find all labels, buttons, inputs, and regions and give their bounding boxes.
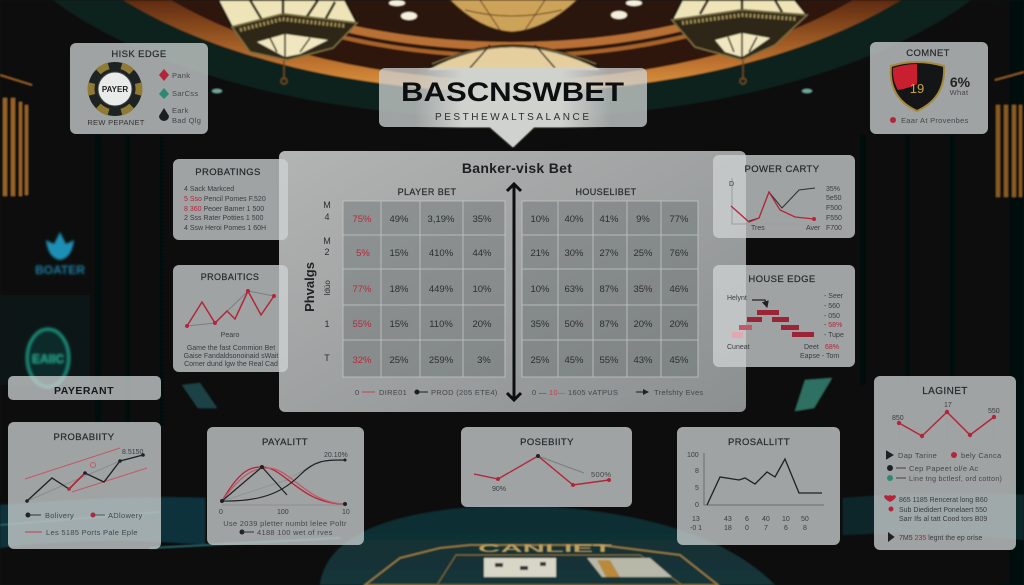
table: player bet: 5% (356, 248, 370, 259)
table: house bet: 76% (669, 248, 689, 259)
heading bar: payerant (8, 376, 161, 400)
table: house bet: 10% (530, 284, 550, 295)
table: house bet: 9% (636, 214, 650, 225)
chart labels: payalitt: 4188 100 wet of rves (257, 528, 333, 537)
chart labels: house edge: Deet (804, 344, 819, 351)
legend: lagniet: bely Canca (961, 451, 1002, 460)
chart labels: prosallitt: 6 (745, 516, 749, 523)
chart labels: house edge: - Tupe (824, 332, 844, 339)
heading: house edge: HOUSE EDGE (748, 274, 816, 285)
table: player bet: 20% (472, 319, 492, 330)
legend: probability (25, 511, 142, 537)
table: house bet: 45% (564, 355, 584, 366)
legend: probability: Bolivery (45, 511, 74, 520)
background sign: green emblem: EAIIC (32, 352, 64, 366)
table: player bet: 75% (352, 214, 372, 225)
stat: 6%: 6% (950, 74, 971, 90)
chart labels: house edge: 68% (825, 344, 839, 351)
background sign: blue logo: BOATER (35, 263, 85, 277)
table: house bet: 25% (530, 355, 550, 366)
chart labels: prosallitt: 8 (695, 468, 699, 475)
table: player bet: 259% (429, 355, 454, 366)
chart labels: house edge: - 560 (824, 303, 840, 310)
row labels: M (323, 236, 331, 246)
panel: main table (279, 151, 746, 412)
table: house bet: 25% (633, 248, 653, 259)
panel: comment shield: What (950, 88, 969, 97)
table: house bet: 30% (564, 248, 584, 259)
chip legend (159, 69, 201, 125)
line chart: posebiity (474, 454, 611, 487)
chart labels: prosallitt: 5 (695, 485, 699, 492)
row labels: M (323, 200, 331, 210)
table: house bet: 20% (669, 319, 689, 330)
row labels (323, 200, 332, 363)
side label: phvalgs: Phvalgs (302, 262, 317, 312)
table: house bet: 27% (599, 248, 619, 259)
legend: lagniet: Line tng bctlesf, ord cotton) (909, 476, 1002, 483)
chart labels: power (729, 181, 842, 232)
chart labels: power: D (729, 181, 734, 188)
panel: comment shield (870, 42, 988, 134)
chart labels: lagniet: 850 (892, 415, 904, 422)
table: house bet: 50% (564, 319, 584, 330)
chart labels: house edge: Helynt (727, 295, 747, 302)
heading: banker-risk bet: Banker-visk Bet (462, 160, 572, 176)
table: house bet: 43% (633, 355, 653, 366)
table: house bet: 87% (599, 284, 619, 295)
table: house bet: 55% (599, 355, 619, 366)
legend: house table (532, 388, 703, 397)
panel: probability (8, 422, 161, 549)
chart labels: power: F700 (826, 225, 842, 232)
chart labels: prosallitt: 6 (784, 525, 788, 532)
line chart: prosallitt (704, 453, 824, 505)
heading: probability: PROBABIITY (53, 432, 115, 443)
panel: probaitics (173, 265, 288, 372)
legend: house table: 1605 vATPUS (568, 388, 618, 397)
chart labels: prosallitt: -0 1 (690, 525, 702, 532)
legend: player table: 0 (355, 388, 359, 397)
legend: player table: DIRE01 (379, 388, 407, 397)
chart labels: house edge (727, 293, 844, 360)
chart labels: power: F550 (826, 215, 842, 222)
table: player bet: 32% (352, 355, 372, 366)
table: player bet: 15% (389, 319, 409, 330)
icon: player chip: PAYER (102, 85, 128, 94)
chart labels: house edge: Eapse - Tom (800, 353, 839, 360)
panel: lagniet (874, 376, 1016, 550)
table: player bet: 110% (429, 319, 453, 330)
heading: payalitt: PAYALITT (262, 437, 308, 448)
panel: prosallitt (677, 427, 840, 545)
chart labels: payalitt (219, 452, 350, 537)
chart labels: payalitt: 20.10% (324, 452, 348, 459)
legend: house table: 10— (549, 388, 566, 397)
row labels: 4 (324, 212, 330, 222)
list: ranked items: 8 360 Peoer Bamer 1 500 (184, 206, 264, 213)
chart labels: power: F500 (826, 205, 842, 212)
chart labels: prosallitt: 50 (801, 516, 809, 523)
table: player bet: 3,19% (428, 214, 455, 225)
notes: lagniet (884, 495, 988, 542)
table: player bet: 35% (472, 214, 492, 225)
chart labels: payalitt: 10 (342, 509, 350, 516)
heading: lagniet: LAGINET (922, 386, 968, 397)
table: house bet: 21% (530, 248, 550, 259)
panel: risk edge (70, 43, 208, 134)
legend: probability: Les 5185 Ports Pale Eple (46, 528, 138, 537)
chart labels: prosallitt: 7 (764, 525, 768, 532)
chart labels: power: Aver (806, 225, 821, 232)
heading: comnet: COMNET (906, 48, 950, 59)
legend: shield (890, 117, 896, 123)
table: house bet: 77% (669, 214, 689, 225)
legend: lagniet: Cep Papeet ol/e Ac (909, 464, 979, 473)
background: table lettering: CANLIET (478, 543, 613, 555)
chip legend: Pank (172, 71, 190, 80)
table: player bet: 10% (472, 284, 492, 295)
panel: probatings (173, 159, 288, 240)
table: house bet: 10% (530, 214, 550, 225)
panel: title (379, 68, 647, 147)
chart labels: payalitt: Use 2039 pletter numbt lelee Poltr (223, 519, 347, 528)
table: player bet: 18% (389, 284, 409, 295)
arrow: helynt (752, 300, 767, 307)
table: player bet: 77% (352, 284, 372, 295)
heading: probatings: PROBATINGS (195, 167, 261, 178)
chart labels: house edge: - 58% (824, 322, 842, 329)
background sign: blue logo (35, 232, 85, 277)
legend: player table (355, 388, 498, 397)
notes: lagniet: Sub Diedidert Ponelaert 550 (899, 507, 987, 514)
legend: lagniet (887, 451, 1002, 483)
table: player bet (343, 201, 505, 377)
chart labels: prosallitt: 13 (692, 516, 700, 523)
caption: probaitics: Gaise Fandaldsonoinaid sWait (184, 353, 278, 360)
legend: lagniet: Dap Tarine (898, 451, 937, 460)
table: player bet: 25% (389, 355, 409, 366)
chart labels: payalitt: 0 (219, 509, 223, 516)
caption: probaitics: Pearo (221, 332, 239, 339)
chart labels: power: Tres (751, 225, 765, 232)
chart labels: payalitt: 100 (277, 509, 289, 516)
caption: probaitics (184, 332, 278, 368)
heading: player bet: PLAYER BET (398, 187, 457, 197)
table: house bet: 45% (669, 355, 689, 366)
table: house bet: 35% (530, 319, 550, 330)
table: house bet: 63% (564, 284, 584, 295)
chart labels: house edge: - 050 (824, 313, 840, 320)
chart labels: power: 5e50 (826, 195, 842, 202)
notes: lagniet: 865 1185 Rencerat long B60 (899, 497, 988, 504)
panel: power carty (713, 155, 855, 238)
chip legend: SarCss (172, 89, 198, 98)
table: house bet: 46% (669, 284, 689, 295)
panel: posebiity (461, 427, 632, 507)
row labels: Idúo (323, 280, 332, 296)
list: ranked items: 5 Sso Pencil Pomes F.520 (184, 196, 266, 203)
chart labels: house edge: - Seer (824, 293, 844, 300)
list: ranked items: 4 Sack Markced (184, 186, 234, 193)
row labels: 1 (324, 319, 330, 329)
chart labels: posebiity: 90% (492, 486, 506, 493)
stepped chart (732, 310, 814, 338)
row labels: T (324, 353, 330, 363)
line chart: probaitics (185, 289, 276, 328)
chart labels: power: 35% (826, 186, 840, 193)
chart labels: prosallitt: 0 (695, 502, 699, 509)
chart labels: prosallitt: 8 (803, 525, 807, 532)
table: house bet: 35% (633, 284, 653, 295)
panel: probability: 8.5150 (122, 449, 144, 456)
icon: shield: 19 (910, 81, 924, 96)
panel: house edge (713, 265, 855, 367)
chart labels: posebiity (492, 470, 611, 493)
heading: probaitics: PROBAITICS (201, 272, 259, 282)
table: player bet: 49% (389, 214, 409, 225)
legend: probability: ADlowery (108, 511, 142, 520)
table: player bet: 449% (429, 284, 454, 295)
chip legend: Bad Qlg (172, 116, 201, 125)
table: house bet: 40% (564, 214, 584, 225)
legend: house table: Trefshty Eves (654, 388, 703, 397)
heading: prosallitt: PROSALLITT (728, 437, 790, 448)
chart labels: prosallitt: 40 (762, 516, 770, 523)
curve chart: payalitt (220, 458, 347, 506)
heading: main title: BASCNSWBET (401, 77, 625, 107)
caption: probaitics: Game the fast Commion Bet (187, 345, 275, 352)
chart labels: lagniet: 550 (988, 408, 1000, 415)
heading: house bet: HOUSELIBET (575, 187, 637, 197)
table: player bet: 15% (389, 248, 409, 259)
heading: power carty: POWER CARTY (745, 164, 820, 175)
chart labels: prosallitt: 100 (687, 452, 699, 459)
table: player bet: 410% (429, 248, 454, 259)
list: ranked items (184, 186, 266, 232)
table: player bet: 3% (477, 355, 491, 366)
panel: comment shield: Eaar At Provenbes (901, 116, 969, 125)
list: ranked items: 2 Sss Rater Potties 1 500 (184, 215, 263, 222)
chip legend: Eark (172, 106, 189, 115)
chart labels: prosallitt: 0 (745, 525, 749, 532)
caption: probaitics: Comer dund lgw the Real Cad (184, 361, 278, 368)
table: house bet: 41% (599, 214, 619, 225)
line chart: probability (25, 448, 147, 503)
panel: payalitt (207, 427, 364, 545)
caption: chip: REW PEPANET (87, 118, 145, 127)
notes: lagniet: 7M5 235 legnt the ep oríse (899, 535, 982, 542)
chart labels: lagniet: 17 (944, 402, 952, 409)
list: ranked items: 4 Ssw Heroi Pomes 1 60H (184, 225, 266, 232)
chart labels: house edge: Cuneat (727, 344, 750, 351)
subtitle: PESTHEWALTSALANCE (435, 112, 589, 123)
table: house bet (522, 201, 698, 377)
arrow: double vertical (507, 184, 521, 400)
table: house bet: 20% (633, 319, 653, 330)
legend: house table: 0 — (532, 388, 547, 397)
legend: player table: PROD (205 ETE4) (431, 388, 498, 397)
heading bar: payerant: PAYERANT (54, 385, 114, 397)
row labels: 2 (324, 247, 330, 257)
line chart: power (731, 178, 816, 224)
line chart: lagniet (897, 410, 996, 440)
chart labels: prosallitt: 43 (724, 516, 732, 523)
chart labels: posebiity: 500% (591, 470, 611, 479)
background sign: green emblem (27, 329, 69, 387)
chart labels: lagniet (892, 402, 1000, 422)
table: house bet: 87% (599, 319, 619, 330)
chart labels: prosallitt: 10 (782, 516, 790, 523)
table: player bet: 44% (472, 248, 492, 259)
heading: risk edge: HISK EDGE (111, 49, 167, 60)
notes: lagniet: Sarr Ifs al tatt Cood tors B09 (899, 516, 987, 523)
chart labels: prosallitt (687, 452, 809, 532)
heading: posebiity: POSEBIITY (520, 437, 574, 448)
table: player bet: 55% (352, 319, 372, 330)
chart labels: prosallitt: 18 (724, 525, 732, 532)
